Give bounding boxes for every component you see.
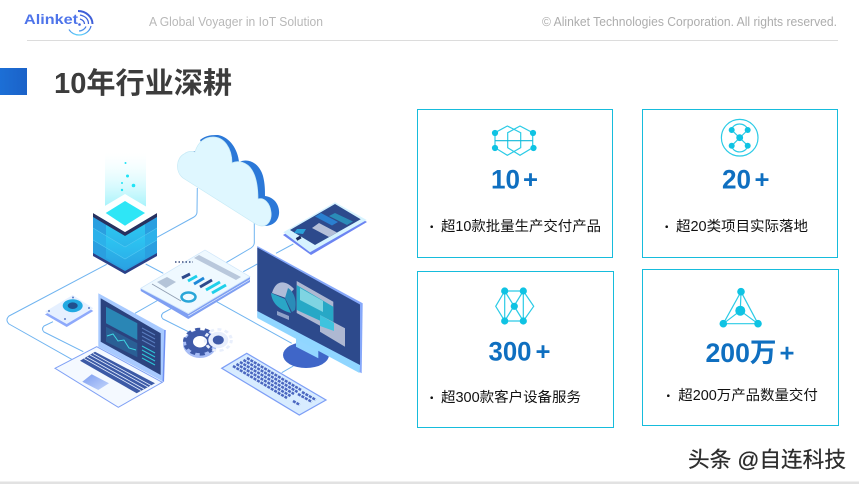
logo: Alinket [24,11,92,35]
icon: laptop [55,293,165,407]
title: 10年行业深耕 [54,67,232,100]
title accent square [0,68,27,95]
icon: overlapping hexagons [492,126,537,155]
icon: keyboard [222,353,326,415]
number: 300 [488,336,532,366]
bullet [665,225,668,228]
icon: hexagon network [496,287,534,325]
plus sign: + [536,338,550,366]
icon: cloud [177,135,279,226]
description: 超200万产品数量交付 [678,386,818,404]
copyright: © Alinket Technologies Corporation. All rights reserved. [542,14,837,29]
number: 200万 [706,338,776,368]
icon: gears [185,329,231,355]
panel: 200万+ [642,270,838,426]
icon: report sheets [141,250,250,319]
icon: camera sensor [45,295,93,327]
panel: 20+ [642,110,838,258]
description: 超10款批量生产交付产品 [441,217,601,235]
description: 超300款客户设备服务 [441,389,581,406]
tagline: A Global Voyager in IoT Solution [149,14,323,29]
connecting lines [7,188,293,373]
icon: circle network [721,119,758,156]
bullet [430,225,433,228]
watermark: 头条 @自连科技 [688,448,846,472]
panel: 10+ [418,110,612,258]
icon: desktop monitor [257,246,363,373]
plus sign: + [780,340,794,368]
plus sign: + [523,166,538,194]
number: 10 [491,164,520,194]
header bar [24,11,838,40]
footer strip [0,482,859,484]
bullet [430,396,433,399]
bullet [667,394,670,397]
icon: triangle network [720,288,762,328]
illustration: IoT network [7,135,367,415]
logo: Alinket: Alinket [24,12,79,27]
description: 超20类项目实际落地 [676,218,808,235]
number: 20 [722,164,751,194]
plus sign: + [754,166,770,194]
panel: 300+ [418,272,614,428]
icon: data server [93,153,157,274]
icon: smartphone [283,202,367,255]
